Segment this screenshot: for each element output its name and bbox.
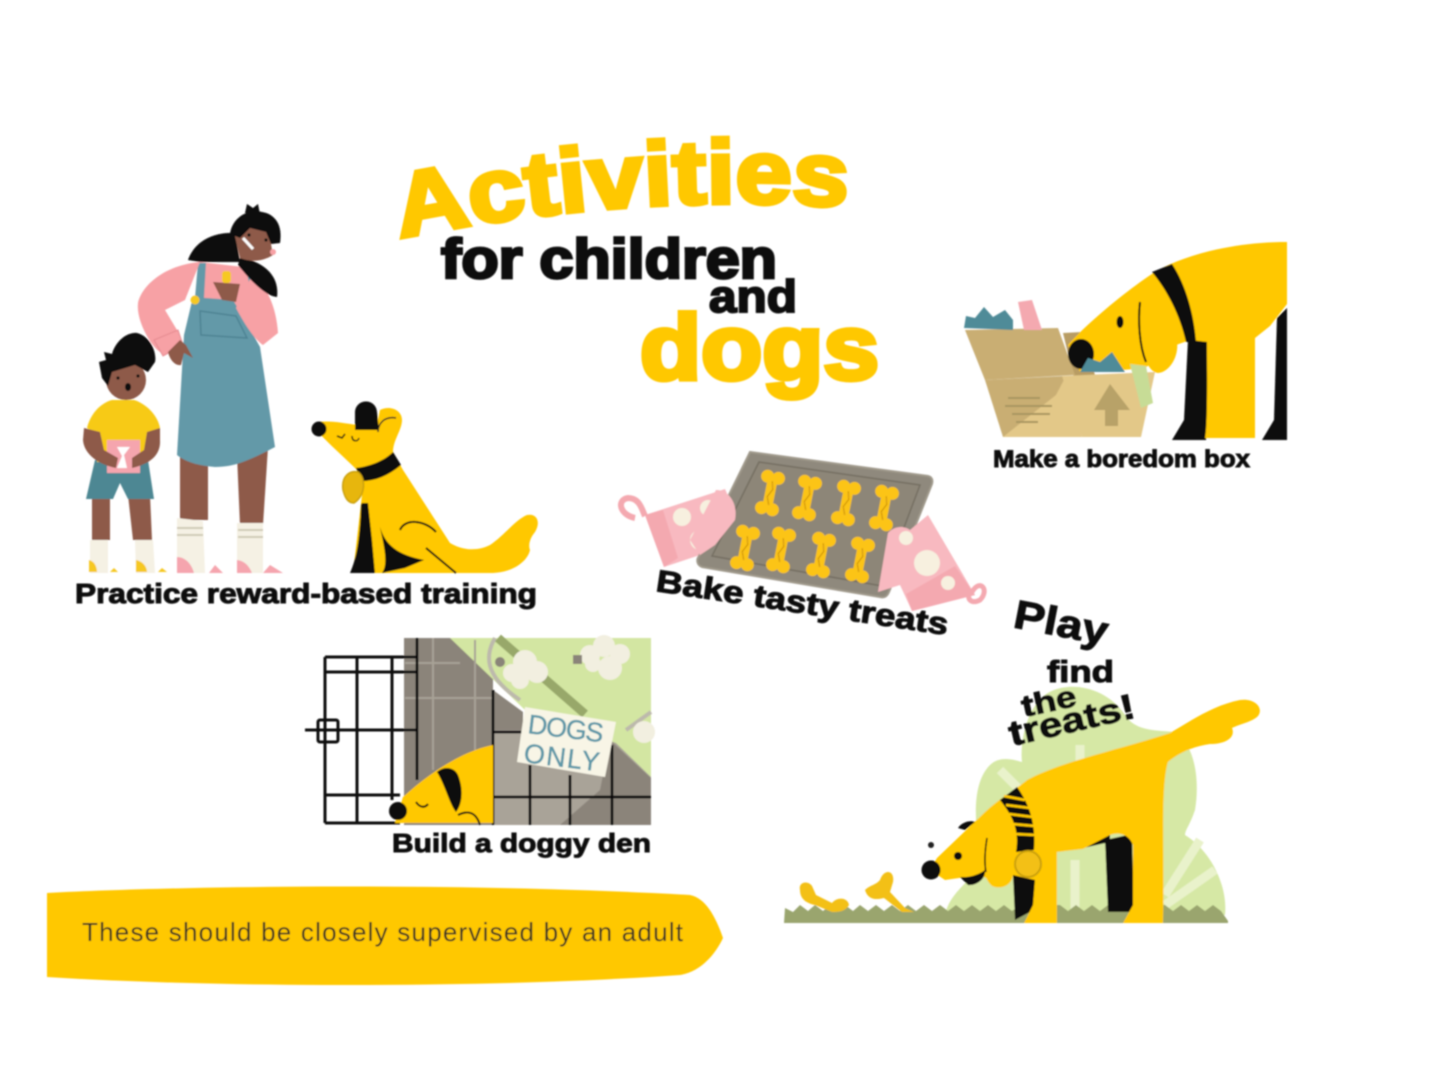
dogs only sign: ONLY [522, 738, 601, 777]
dogs only sign [517, 707, 616, 777]
caption: play find the treats [1005, 593, 1139, 754]
oven mitt right [878, 515, 984, 611]
caption: play find the treats: find [1047, 654, 1114, 689]
dog biscuits [729, 469, 900, 584]
title [398, 134, 879, 402]
crate grid [305, 638, 651, 825]
caption: doggy den: Build a doggy den [392, 828, 651, 858]
supervision banner [47, 886, 723, 985]
illustration: baking tray [621, 452, 984, 642]
caption: play find the treats: treats! [1005, 687, 1139, 754]
caption: play find the treats: the [1019, 680, 1079, 724]
illustration: find the treats [784, 593, 1260, 923]
illustration: doggy den [305, 635, 655, 858]
caption: boredom box: Make a boredom box [993, 446, 1251, 473]
buried bones [800, 872, 914, 912]
caption: reward-based training: Practice reward-based training [75, 578, 537, 609]
caption: play find the treats: Play [1010, 593, 1113, 654]
sheep [495, 635, 655, 743]
illustration: boredom box [964, 242, 1287, 473]
whole artwork [46, 134, 1288, 986]
sitting dog [312, 402, 538, 573]
banner shape [47, 886, 723, 985]
title words: for children: for children [441, 227, 777, 290]
dogs only sign: DOGS [526, 709, 605, 748]
left mitt thumb [690, 490, 736, 555]
title word: Activities: Activities [398, 134, 848, 241]
oven mitt left [621, 489, 745, 567]
woman [138, 204, 283, 573]
child [83, 333, 167, 573]
box [964, 300, 1155, 437]
title word: and: and [709, 271, 797, 322]
illustration: woman, child and dog training [75, 204, 538, 609]
playing dog [922, 700, 1260, 923]
den wall and garden [404, 638, 651, 825]
sleeping dog [389, 745, 493, 825]
title word: dogs: dogs [640, 297, 879, 399]
baking tray [697, 452, 932, 597]
ground [784, 905, 1228, 923]
bush [945, 687, 1225, 915]
banner text: These should be closely supervised by an adult [82, 917, 684, 947]
sniffing dog [1068, 242, 1287, 440]
caption: bake tasty treats: Bake tasty treats [654, 563, 951, 642]
